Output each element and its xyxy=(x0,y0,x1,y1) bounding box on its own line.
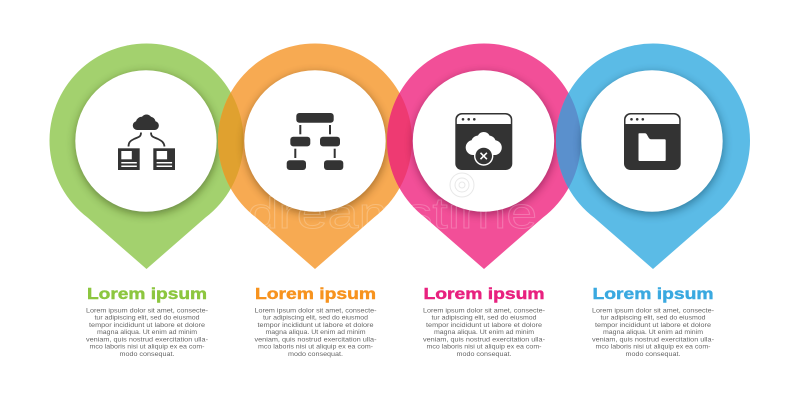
icon: hierarchy chart xyxy=(287,113,343,170)
body text: pink column: veniam, quis nostrud exercitation ulla- xyxy=(423,336,545,343)
body text: green column: veniam, quis nostrud exercitation ulla- xyxy=(86,336,208,343)
blue map pin xyxy=(556,44,750,269)
body text: blue column: magna aliqua. Ut enim ad minim xyxy=(603,329,703,336)
body text: blue column: Lorem ipsum dolor sit amet, consecte- xyxy=(592,307,714,314)
body text: orange column: mco laboris nisi ut aliquip ex ea com- xyxy=(258,344,373,351)
column 2 text xyxy=(254,286,376,358)
body text: blue column: mco laboris nisi ut aliquip ex ea com- xyxy=(596,344,710,351)
body text: orange column: tempor incididunt ut labore et dolore xyxy=(258,322,374,329)
green map pin xyxy=(49,44,243,269)
body text: green column: magna aliqua. Ut enim ad minim xyxy=(97,329,197,336)
orange pin white circle xyxy=(244,70,386,212)
heading: green: Lorem ipsum xyxy=(87,286,207,303)
icon: cloud linked to two documents xyxy=(118,114,175,170)
watermark: dreamstime. xyxy=(248,189,552,238)
body text: orange column: tur adipiscing elit, sed do eiusmod xyxy=(263,315,369,322)
pink pin white circle xyxy=(413,70,554,212)
body text: blue column: tur adipiscing elit, sed do eiusmod xyxy=(600,315,706,322)
body text: blue column: modo consequat. xyxy=(626,351,681,358)
panel: pink step xyxy=(387,44,581,269)
panel: blue step xyxy=(556,44,750,269)
heading: pink: Lorem ipsum xyxy=(424,286,544,303)
green pin white circle xyxy=(75,70,217,212)
body text: pink column: Lorem ipsum dolor sit amet, consecte- xyxy=(423,307,545,314)
body text: orange column: modo consequat. xyxy=(288,351,343,358)
body text: pink column xyxy=(423,307,545,358)
body text: pink column: modo consequat. xyxy=(456,351,512,358)
body text: green column: tempor incididunt ut labore et dolore xyxy=(89,322,206,329)
body text: green column: tur adipiscing elit, sed do eiusmod xyxy=(94,315,200,322)
column 3 text xyxy=(423,286,545,358)
body text: pink column: magna aliqua. Ut enim ad minim xyxy=(434,329,534,336)
column 1 text xyxy=(86,286,208,358)
icon: browser window with cloud error xyxy=(455,113,512,170)
body text: pink column: tempor incididunt ut labore et dolore xyxy=(426,322,543,329)
body text: green column: Lorem ipsum dolor sit amet, consecte- xyxy=(86,307,208,314)
body text: orange column: magna aliqua. Ut enim ad minim xyxy=(266,329,366,336)
body text: green column xyxy=(86,307,208,358)
blue pin white circle xyxy=(581,70,723,212)
body text: blue column: veniam, quis nostrud exercitation ulla- xyxy=(592,336,714,343)
body text: orange column xyxy=(254,307,376,358)
body text: orange column: veniam, quis nostrud exercitation ulla- xyxy=(254,336,376,343)
body text: orange column: Lorem ipsum dolor sit amet, consecte- xyxy=(254,307,376,314)
body text: pink column: mco laboris nisi ut aliquip ex ea com- xyxy=(426,344,542,351)
panel: orange step xyxy=(218,44,412,269)
watermark xyxy=(248,173,552,238)
body text: green column: mco laboris nisi ut aliquip ex ea com- xyxy=(90,344,204,351)
body text: blue column: tempor incididunt ut labore et dolore xyxy=(595,322,712,329)
body text: blue column xyxy=(592,307,714,358)
column 4 text xyxy=(592,286,714,358)
pink map pin xyxy=(387,44,581,269)
body text: green column: modo consequat. xyxy=(120,351,175,358)
icon: browser window with folder xyxy=(624,113,681,170)
orange map pin xyxy=(218,44,412,269)
panel: green step xyxy=(49,44,243,269)
body text: pink column: tur adipiscing elit, sed do eiusmod xyxy=(432,315,537,322)
heading: blue: Lorem ipsum xyxy=(592,286,714,303)
heading: orange: Lorem ipsum xyxy=(255,286,376,303)
